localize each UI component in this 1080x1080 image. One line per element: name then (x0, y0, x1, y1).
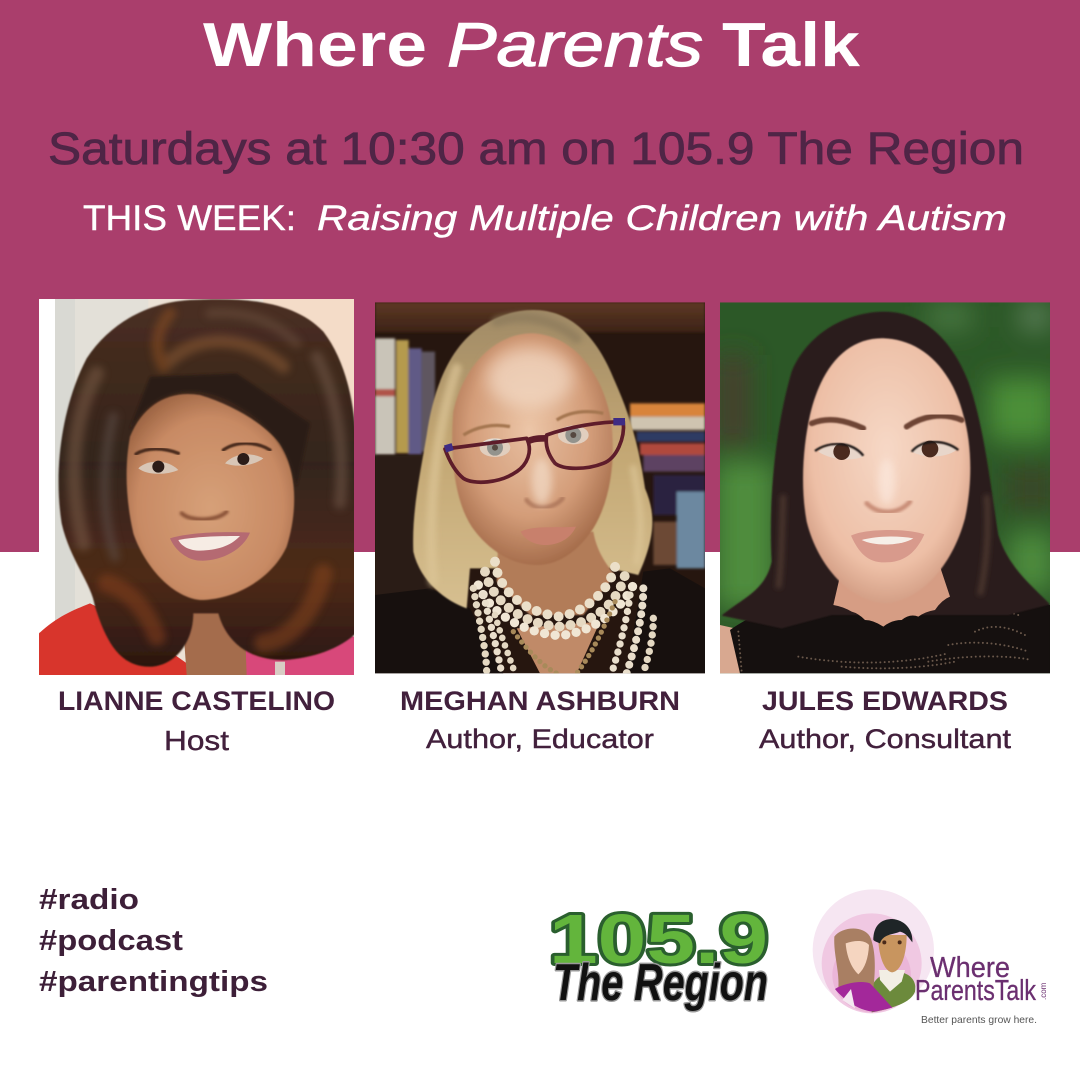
fringe shadow (129, 373, 310, 487)
title: Parents (447, 11, 703, 80)
hair (413, 310, 652, 608)
caption: Lianne Castelino: LIANNE CASTELINO (58, 686, 335, 716)
logo: Where Parents Talk (813, 889, 1048, 1026)
shelf (375, 302, 705, 332)
glasses (445, 422, 625, 482)
face (452, 333, 613, 565)
caption: Meghan Ashburn (400, 686, 680, 754)
nose (182, 512, 227, 519)
photo: Jules Edwards (715, 302, 1055, 673)
logo woman (834, 929, 892, 1012)
neck (184, 612, 247, 675)
this week topic: THIS WEEK: (83, 199, 296, 238)
red shirt (39, 603, 203, 675)
eyes (480, 438, 510, 457)
chair (375, 453, 422, 456)
books left (375, 338, 435, 455)
title (203, 11, 861, 80)
this week topic: Raising Multiple Children with Autism (317, 199, 1007, 238)
eyes (138, 462, 178, 474)
logo: 105.9 The Region (549, 900, 768, 1012)
lips (851, 530, 924, 562)
black lace top (730, 604, 1050, 674)
schedule line: Saturdays at 10:30 am on 105.9 The Region (48, 123, 1024, 174)
hashtags: #parentingtips (39, 966, 268, 998)
logo: Where Parents Talk: ParentsTalk (915, 975, 1036, 1007)
nose (867, 502, 910, 512)
hair sheen (778, 495, 988, 595)
this week topic (83, 199, 1007, 238)
hashtags (39, 884, 268, 998)
caption: Jules Edwards (759, 686, 1012, 754)
title: Where (203, 11, 427, 80)
pearl necklace (473, 558, 653, 673)
caption: Meghan Ashburn: Author, Educator (426, 724, 654, 754)
neck (833, 562, 950, 627)
nose (527, 498, 563, 507)
long hair (722, 312, 1050, 628)
hair (59, 299, 356, 667)
eyes (818, 445, 863, 459)
books right (630, 403, 705, 568)
lace pattern (738, 611, 1032, 672)
hair highlights (74, 313, 341, 643)
logo wordmark: Where (930, 952, 1010, 984)
necklace (275, 662, 285, 675)
shoulder skin (720, 625, 740, 673)
caption: Lianne Castelino (58, 686, 335, 756)
blurred foliage (715, 305, 1055, 608)
logo: 105.9 The Region: The Region (553, 954, 768, 1012)
chest skin (517, 622, 600, 673)
logo man (872, 919, 915, 1012)
logo circles (813, 889, 934, 1013)
logo: Where Parents Talk: .com (1039, 982, 1048, 1000)
brows (812, 416, 962, 428)
face (803, 338, 970, 603)
caption: Jules Edwards: Author, Consultant (759, 724, 1012, 754)
hair strands (431, 318, 640, 582)
forehead highlight (487, 348, 573, 408)
face (127, 394, 294, 600)
neck (497, 532, 615, 615)
logo: 105.9 The Region: 105.9 (549, 900, 768, 978)
background band (0, 0, 1080, 552)
smile (170, 532, 250, 561)
caption: Lianne Castelino: Host (164, 725, 229, 756)
black top (375, 588, 503, 673)
photo: Lianne Castelino (39, 299, 357, 675)
title: Talk (722, 11, 861, 80)
hashtags: #podcast (39, 925, 183, 957)
caption: Jules Edwards: JULES EDWARDS (762, 686, 1008, 716)
logo tagline: Better parents grow here. (921, 1014, 1037, 1026)
brows (463, 412, 603, 435)
photo: Meghan Ashburn (375, 302, 705, 673)
caption: Meghan Ashburn: MEGHAN ASHBURN (400, 686, 680, 716)
hashtags: #radio (39, 884, 139, 916)
lips (521, 527, 576, 545)
brows (136, 449, 178, 454)
